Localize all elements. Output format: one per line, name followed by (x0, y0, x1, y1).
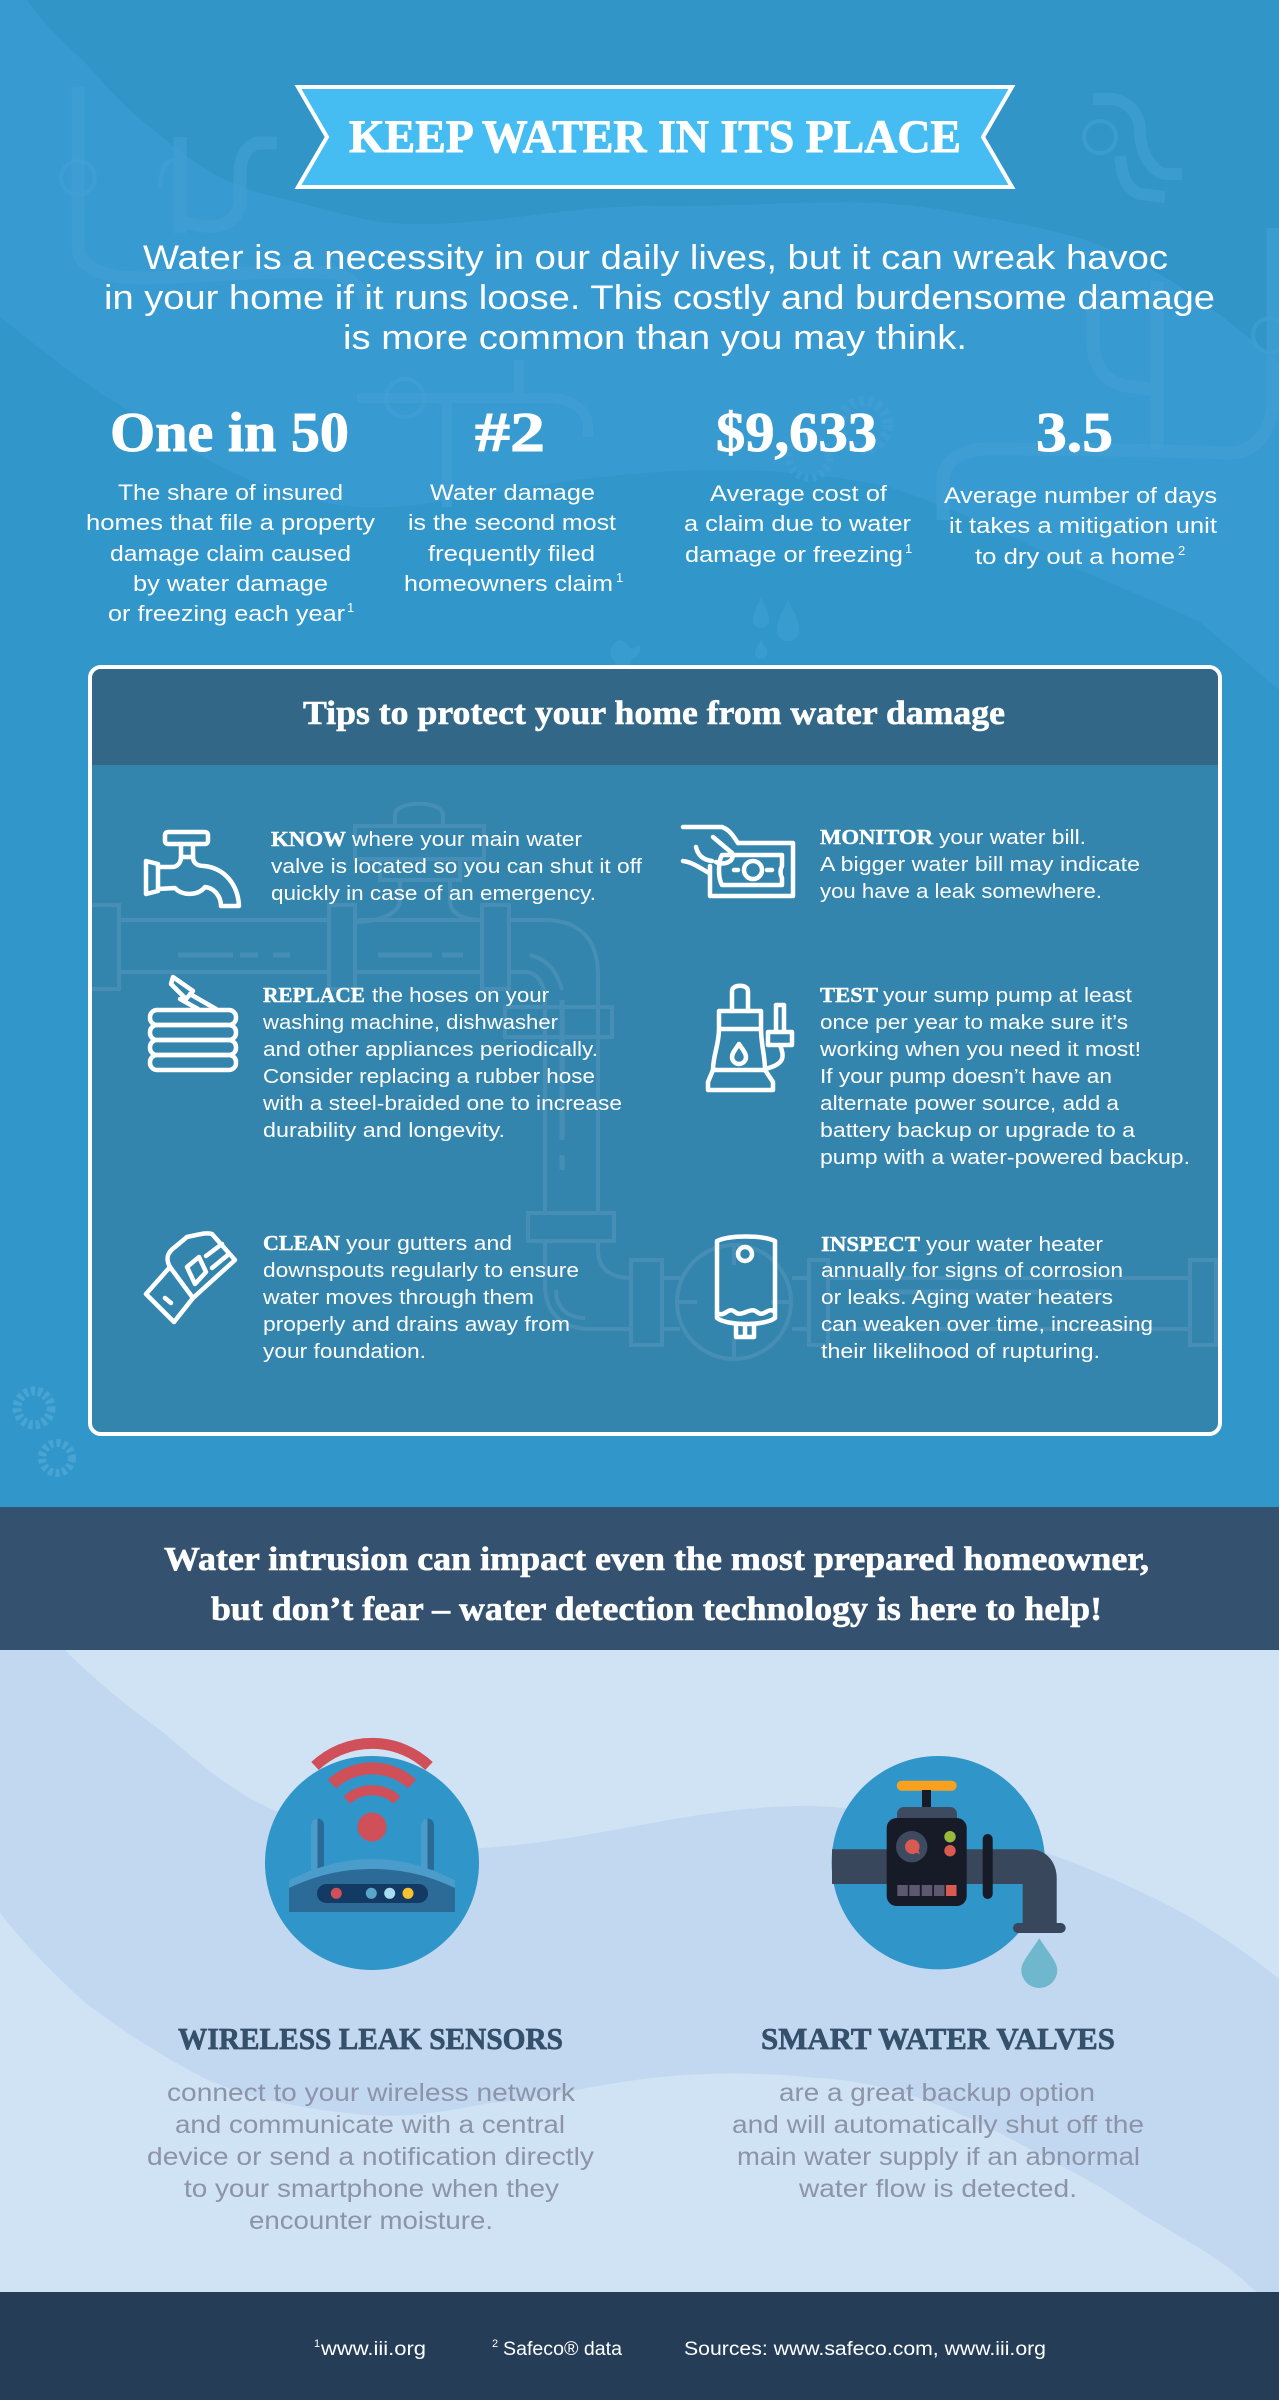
tip: inspect (821, 1232, 1153, 1363)
tip: clean (262, 1231, 579, 1363)
stat: drying days: Average number of days (944, 483, 1217, 508)
stat: average cost: 1 (905, 541, 912, 556)
stat: one in 50: The share of insured (118, 480, 343, 505)
tip: replace: Consider replacing a rubber hose (263, 1066, 595, 1088)
stat: average cost: $9,633 (716, 402, 877, 464)
tip: replace: washing machine, dishwasher (262, 1012, 558, 1034)
stat: number 2: frequently filed (428, 541, 595, 566)
footer: sources (0, 2292, 1279, 2400)
icon: faucet (146, 832, 239, 906)
stat: number 2: Water damage (430, 480, 595, 505)
tip: clean: your foundation. (263, 1341, 426, 1363)
stat: one in 50: homes that file a property (86, 510, 375, 535)
background: light wave section (0, 1650, 1279, 2292)
tip: inspect: or leaks. Aging water heaters (821, 1287, 1113, 1309)
tip: replace (262, 983, 622, 1142)
panel: tips (90, 667, 1220, 1434)
icon: glove (146, 1233, 235, 1322)
stat: average cost: a claim due to water (684, 511, 911, 536)
tip: monitor: A bigger water bill may indicate (820, 854, 1140, 876)
tip: know: valve is located so you can shut it off (271, 856, 643, 878)
block: wireless leak sensors (147, 2021, 595, 2235)
tip: clean: properly and drains away from (263, 1314, 570, 1336)
band: water detection message (0, 1507, 1279, 1650)
stat: average cost (684, 402, 912, 567)
stat: one in 50: 1 (347, 600, 354, 615)
stat: drying days: it takes a mitigation unit (949, 513, 1217, 538)
block: smart water valves: main water supply if an abnormal (737, 2143, 1140, 2171)
icon: smart water valve (832, 1756, 1066, 1988)
block: smart water valves: and will automatically shut off the (732, 2111, 1144, 2139)
block: smart water valves (732, 2021, 1144, 2203)
footer: sources: www.iii.org (320, 2339, 426, 2360)
tip: know: where your main water (351, 829, 582, 851)
footer: sources: Safeco® data (503, 2339, 622, 2360)
tip: test: battery backup or upgrade to a (820, 1120, 1136, 1142)
icon: water heater (717, 1236, 775, 1337)
stat: number 2: #2 (475, 402, 545, 464)
tip: monitor: MONITOR (820, 825, 934, 849)
footer: sources: 1 (314, 2338, 320, 2350)
intro text: is more common than you may think. (343, 319, 967, 357)
tip: test: your sump pump at least (883, 985, 1132, 1007)
panel heading: Tips to protect your home from water damage (303, 695, 1005, 732)
tip: inspect: their likelihood of rupturing. (821, 1341, 1100, 1363)
footer: sources: Sources: www.safeco.com, www.iii.org (684, 2339, 1046, 2360)
icon: water bill (683, 827, 793, 896)
block: smart water valves: SMART WATER VALVES (761, 2021, 1115, 2056)
stat: average cost: Average cost of (710, 481, 888, 506)
tip: monitor: you have a leak somewhere. (820, 881, 1102, 903)
stat: number 2 (404, 402, 623, 596)
tip: know (271, 827, 643, 905)
tip: test: pump with a water-powered backup. (820, 1147, 1190, 1169)
tip: test: alternate power source, add a (820, 1093, 1120, 1115)
block: smart water valves: are a great backup option (779, 2079, 1095, 2107)
tip: test (819, 983, 1190, 1169)
block: smart water valves: water flow is detected. (798, 2175, 1077, 2203)
band: water detection message: Water intrusion can impact even the most prepared homeowner, (164, 1541, 1149, 1578)
stat: number 2: 1 (616, 570, 623, 585)
icon: sump pump (708, 986, 792, 1090)
block: wireless leak sensors: connect to your wireless network (167, 2079, 576, 2107)
stat: one in 50: by water damage (133, 571, 328, 596)
tip: test: working when you need it most! (819, 1039, 1141, 1061)
stat: one in 50: damage claim caused (110, 541, 351, 566)
tip: clean: your gutters and (346, 1233, 512, 1255)
title banner (298, 87, 1012, 187)
tip: know: quickly in case of an emergency. (271, 883, 596, 905)
stat: one in 50: or freezing each year (108, 601, 345, 626)
intro text: Water is a necessity in our daily lives, but it can wreak havoc (143, 239, 1168, 277)
stat: drying days (944, 402, 1217, 569)
stat: average cost: damage or freezing (685, 542, 903, 567)
tip: know: KNOW (271, 827, 346, 851)
icon: hose (150, 977, 236, 1070)
block: wireless leak sensors: encounter moisture. (249, 2207, 493, 2235)
tip: inspect: annually for signs of corrosion (821, 1260, 1123, 1282)
tip: inspect: your water heater (926, 1234, 1103, 1256)
band: water detection message: but don’t fear – water detection technology is here to help! (211, 1591, 1102, 1628)
stat: number 2: homeowners claim (404, 571, 613, 596)
tip: monitor: your water bill. (939, 827, 1086, 849)
tip: replace: durability and longevity. (263, 1120, 505, 1142)
stat: drying days: 2 (1178, 543, 1185, 558)
icon: wireless router (265, 1743, 479, 1970)
background: blue water section (0, 0, 1279, 1507)
block: wireless leak sensors: device or send a notification directly (147, 2143, 595, 2171)
block: wireless leak sensors: WIRELESS LEAK SENSORS (178, 2021, 563, 2056)
tip: test: once per year to make sure it’s (820, 1012, 1128, 1034)
block: wireless leak sensors: and communicate with a central (175, 2111, 565, 2139)
tip: test: If your pump doesn’t have an (820, 1066, 1112, 1088)
tip: test: TEST (820, 983, 878, 1007)
stat: one in 50 (86, 402, 375, 626)
tip: replace: the hoses on your (372, 985, 549, 1007)
tip: inspect: INSPECT (821, 1232, 920, 1256)
tip: clean: water moves through them (262, 1287, 534, 1309)
title banner: KEEP WATER IN ITS PLACE (349, 111, 961, 163)
tip: replace: with a steel-braided one to increase (262, 1093, 622, 1115)
footer: sources: 2 (492, 2338, 498, 2350)
stat: number 2: is the second most (408, 510, 616, 535)
tip: replace: and other appliances periodically. (263, 1039, 598, 1061)
tip: replace: REPLACE (263, 983, 365, 1007)
block: wireless leak sensors: to your smartphone when they (184, 2175, 560, 2203)
tip: clean: downspouts regularly to ensure (263, 1260, 579, 1282)
intro text (104, 239, 1215, 357)
tip: inspect: can weaken over time, increasing (821, 1314, 1153, 1336)
stat: one in 50: One in 50 (110, 402, 349, 464)
stat: drying days: to dry out a home (975, 544, 1175, 569)
intro text: in your home if it runs loose. This costly and burdensome damage (104, 279, 1215, 317)
stat: drying days: 3.5 (1036, 402, 1113, 464)
tip: clean: CLEAN (263, 1231, 340, 1255)
tip: monitor (820, 825, 1140, 903)
